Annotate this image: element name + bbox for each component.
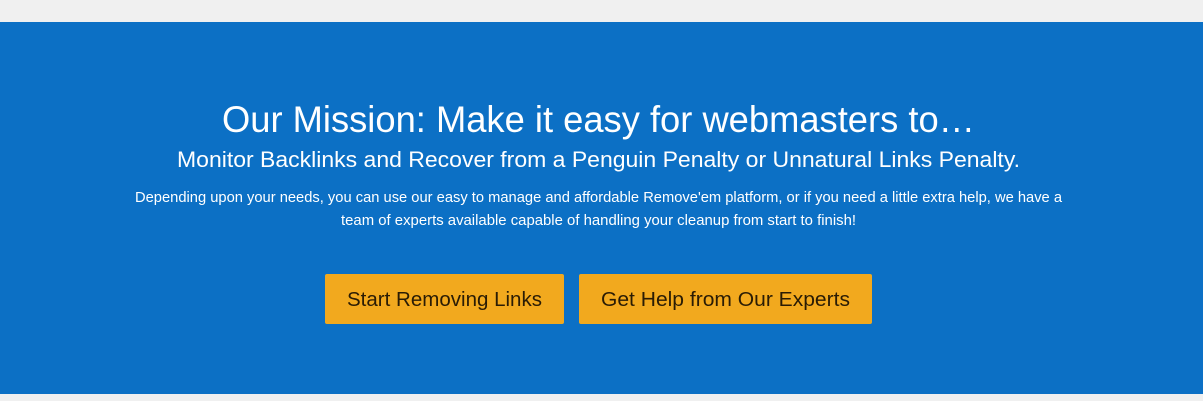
button: get help from our experts xyxy=(579,274,872,324)
button: start removing links: Start Removing Links xyxy=(347,288,542,311)
description text: team of experts available capable of handling your cleanup from start to finish! xyxy=(341,213,856,229)
subtitle: Monitor Backlinks and Recover from a Penguin Penalty or Unnatural Links Penalty. xyxy=(177,147,1020,172)
button: start removing links xyxy=(325,274,564,324)
description text: Depending upon your needs, you can use our easy to manage and affordable Remove'em platform, or if you need a little extra help, we have a xyxy=(135,190,1063,206)
description text xyxy=(135,190,1063,229)
button: get help from our experts: Get Help from Our Experts xyxy=(601,288,850,311)
title: Our Mission: Make it easy for webmasters to… xyxy=(222,99,975,140)
